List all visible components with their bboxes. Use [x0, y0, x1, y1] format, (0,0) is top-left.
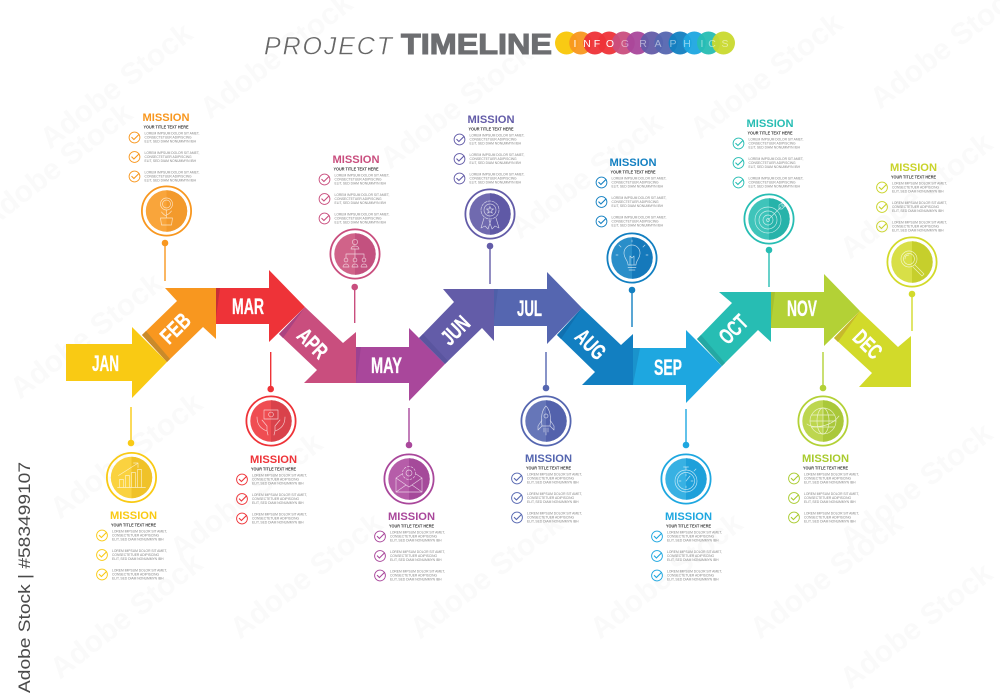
arrow: jan	[66, 327, 167, 398]
checklist	[789, 473, 859, 524]
checklist: LOREM IMPSUM DOLOR SIT AMET,	[112, 569, 167, 573]
checklist: CONSECTETUER ADIPISCING	[804, 477, 852, 481]
pin: apr	[351, 284, 358, 323]
checklist: LOREM IMPSUM DOLOR SIT AMET,	[334, 193, 389, 197]
checklist: LOREM IMPSUM DOLOR SIT AMET,	[334, 174, 389, 178]
checklist	[733, 138, 803, 189]
checklist: CONSECTETUER ADIPISCING	[390, 554, 438, 558]
checklist: LOREM IMPSUM DOLOR SIT AMET,	[390, 550, 445, 554]
checklist: ELIT, SED DIAM NONUMMYN IBH	[334, 182, 387, 186]
checklist: CONSECTETUER ADIPISCING	[252, 478, 300, 482]
title badge: infographics circles: S	[721, 38, 729, 50]
watermark pattern: Adobe Stock	[504, 106, 669, 246]
title badge: infographics circles: H	[683, 38, 691, 50]
heading: MISSION	[142, 112, 190, 124]
title badge: infographics circles: P	[669, 38, 677, 50]
checklist: LOREM IMPSUM DOLOR SIT AMET,	[804, 512, 859, 516]
heading: MISSION	[332, 154, 380, 166]
checklist: LOREM IMPSUM DOLOR SIT AMET,	[804, 492, 859, 496]
checklist: LOREM IMPSUM DOLOR SIT AMET,	[112, 530, 167, 534]
arrow: oct: OCT	[714, 309, 753, 349]
watermark pattern: Adobe Stock	[164, 426, 329, 566]
timeline arrows	[66, 270, 911, 403]
checklist: ELIT, SED DIAM NONUMMYN IBH	[892, 209, 944, 213]
checklist: LOREM IMPSUM DOLOR SIT AMET,	[112, 549, 167, 553]
checklist: CONSECTETUER ADIPISCING	[748, 142, 796, 146]
heading: MISSION	[610, 157, 656, 169]
checklist: ELIT, SED DIAM NONUMMYN IBH	[748, 165, 801, 169]
icon: globe	[798, 396, 848, 446]
checklist: LOREM IMPSUM DOLOR SIT AMET,	[252, 493, 307, 497]
arrow: dec: DEC	[848, 325, 887, 364]
title word: timeline: TIMELINE	[401, 29, 552, 61]
watermark pattern: Adobe Stock	[44, 386, 209, 526]
checklist: CONSECTETUER ADIPISCING	[144, 155, 192, 159]
checklist: ELIT, SED DIAM NONUMMYN IBH	[612, 204, 664, 208]
checklist: LOREM IMPSUM DOLOR SIT AMET,	[470, 153, 524, 157]
stock id caption: Adobe Stock | #583499107	[15, 462, 34, 693]
icon: target with arrow	[744, 194, 794, 244]
arrow: jan: JAN	[92, 351, 119, 376]
watermark pattern: Adobe Stock	[404, 506, 569, 646]
panel: oct mission	[733, 118, 803, 189]
arrow: jul: JUL	[517, 296, 542, 321]
checklist: CONSECTETUER ADIPISCING	[804, 516, 852, 520]
icon: team hierarchy	[330, 229, 380, 279]
checklist: CONSECTETUER ADIPISCING	[470, 138, 517, 142]
checklist: LOREM IMPSUM DOLOR SIT AMET,	[612, 177, 666, 181]
checklist: CONSECTETUER ADIPISCING	[527, 477, 575, 481]
heading: MISSION	[890, 162, 937, 174]
checklist: LOREM IMPSUM DOLOR SIT AMET,	[527, 473, 582, 477]
checklist: ELIT, SED DIAM NONUMMYN IBH	[804, 500, 856, 504]
icon: stopwatch	[661, 454, 711, 504]
checklist	[129, 132, 199, 183]
checklist: CONSECTETUER ADIPISCING	[390, 574, 438, 578]
arrow: aug: AUG	[570, 324, 611, 365]
panel: aug mission	[596, 157, 666, 228]
pin: oct	[766, 247, 772, 287]
arrow: sep: SEP	[654, 355, 682, 380]
subtitle: YOUR TITLE TEXT HERE	[891, 174, 936, 180]
checklist: LOREM IMPSUM DOLOR SIT AMET,	[144, 132, 199, 136]
icon: award rosette	[465, 189, 515, 239]
checklist: CONSECTETUER ADIPISCING	[527, 496, 575, 500]
title word: project: PROJECT	[264, 32, 394, 60]
checklist	[596, 177, 666, 228]
checklist: LOREM IMPSUM DOLOR SIT AMET,	[144, 171, 199, 175]
watermark pattern: Adobe Stock	[374, 36, 539, 176]
checklist: CONSECTETUER ADIPISCING	[748, 161, 796, 165]
title badge: infographics circles: O	[606, 38, 614, 50]
checklist: LOREM IMPSUM DOLOR SIT AMET,	[390, 531, 445, 535]
title badge: infographics circles: N	[583, 38, 591, 50]
checklist: CONSECTETUER ADIPISCING	[144, 175, 192, 179]
watermark pattern: Adobe Stock	[44, 546, 209, 686]
arrow: nov: NOV	[787, 296, 817, 321]
checklist: LOREM IMPSUM DOLOR SIT AMET,	[892, 221, 947, 225]
pin: aug	[629, 287, 635, 327]
panel: jul mission	[512, 453, 582, 524]
heading: MISSION	[110, 510, 157, 522]
heading: MISSION	[468, 114, 514, 126]
arrow: jul	[494, 272, 582, 344]
title badge: infographics circles: I	[701, 38, 703, 50]
checklist: LOREM IMPSUM DOLOR SIT AMET,	[527, 492, 582, 496]
checklist: CONSECTETUER ADIPISCING	[470, 177, 517, 181]
panel: jan mission	[97, 510, 167, 581]
pin: sep	[683, 409, 689, 448]
checklist: LOREM IMPSUM DOLOR SIT AMET,	[144, 151, 199, 155]
title	[264, 29, 735, 61]
checklist: ELIT, SED DIAM NONUMMYN IBH	[527, 500, 579, 504]
title badge: infographics circles: C	[708, 38, 716, 50]
checklist: CONSECTETUER ADIPISCING	[334, 197, 382, 201]
pin: may	[406, 408, 412, 448]
checklist: CONSECTETUER ADIPISCING	[112, 534, 160, 538]
checklist: LOREM IMPSUM DOLOR SIT AMET,	[390, 570, 445, 574]
arrow: aug	[557, 308, 633, 385]
heading: MISSION	[665, 511, 712, 523]
checklist	[97, 530, 167, 581]
checklist: CONSECTETUER ADIPISCING	[667, 554, 715, 558]
checklist: LOREM IMPSUM DOLOR SIT AMET,	[892, 201, 947, 205]
icon: magnifier	[887, 237, 937, 287]
arrow: mar	[216, 270, 305, 342]
icon: hands with banknote	[246, 396, 296, 446]
checklist: LOREM IMPSUM DOLOR SIT AMET,	[612, 196, 666, 200]
checklist: CONSECTETUER ADIPISCING	[804, 496, 852, 500]
checklist: LOREM IMPSUM DOLOR SIT AMET,	[748, 177, 803, 181]
subtitle: YOUR TITLE TEXT HERE	[610, 170, 656, 174]
checklist: ELIT, SED DIAM NONUMMYN IBH	[334, 201, 387, 205]
checklist: CONSECTETUER ADIPISCING	[667, 574, 715, 578]
subtitle: YOUR TITLE TEXT HERE	[803, 466, 848, 470]
panel: mar mission	[237, 454, 307, 525]
icon badges	[107, 186, 937, 504]
checklist: ELIT, SED DIAM NONUMMYN IBH	[804, 481, 856, 485]
arrow: jun: JUN	[436, 311, 475, 350]
checklist: ELIT, SED DIAM NONUMMYN IBH	[612, 224, 664, 228]
icon: light bulb	[607, 233, 657, 283]
watermark pattern: Adobe Stock	[834, 126, 999, 266]
checklist	[454, 134, 524, 185]
arrow: may: MAY	[371, 353, 402, 378]
watermark pattern: Adobe Stock	[34, 16, 199, 156]
arrow: nov	[771, 274, 860, 346]
checklist	[652, 531, 722, 582]
checklist	[319, 174, 389, 225]
checklist: ELIT, SED DIAM NONUMMYN IBH	[527, 481, 579, 485]
subtitle: YOUR TITLE TEXT HERE	[389, 524, 434, 528]
checklist: ELIT, SED DIAM NONUMMYN IBH	[144, 140, 197, 144]
checklist: LOREM IMPSUM DOLOR SIT AMET,	[667, 570, 722, 574]
checklist: ELIT, SED DIAM NONUMMYN IBH	[112, 538, 164, 542]
checklist: ELIT, SED DIAM NONUMMYN IBH	[144, 159, 197, 163]
checklist: LOREM IMPSUM DOLOR SIT AMET,	[804, 473, 859, 477]
subtitle: YOUR TITLE TEXT HERE	[526, 466, 571, 470]
checklist: CONSECTETUER ADIPISCING	[748, 181, 796, 185]
watermark pattern: Adobe Stock	[684, 6, 849, 146]
checklist: ELIT, SED DIAM NONUMMYN IBH	[892, 190, 944, 194]
watermark pattern: Adobe Stock	[834, 416, 999, 556]
arrow: jun	[419, 289, 494, 364]
checklist: ELIT, SED DIAM NONUMMYN IBH	[252, 482, 304, 486]
heading: MISSION	[250, 454, 297, 466]
checklist: ELIT, SED DIAM NONUMMYN IBH	[527, 520, 579, 524]
subtitle: YOUR TITLE TEXT HERE	[666, 524, 711, 528]
checklist: CONSECTETUER ADIPISCING	[612, 200, 659, 204]
checklist: CONSECTETUER ADIPISCING	[892, 205, 940, 209]
checklist: ELIT, SED DIAM NONUMMYN IBH	[667, 558, 719, 562]
checklist: LOREM IMPSUM DOLOR SIT AMET,	[748, 157, 803, 161]
checklist: LOREM IMPSUM DOLOR SIT AMET,	[667, 550, 722, 554]
title badge: infographics circles: A	[654, 38, 662, 50]
checklist: ELIT, SED DIAM NONUMMYN IBH	[334, 221, 387, 225]
checklist: ELIT, SED DIAM NONUMMYN IBH	[390, 558, 442, 562]
checklist: LOREM IMPSUM DOLOR SIT AMET,	[892, 182, 947, 186]
arrow: feb: FEB	[155, 308, 196, 349]
icon: envelope with gear	[384, 454, 434, 504]
arrow: may	[356, 328, 445, 401]
panel: sep mission	[652, 511, 722, 582]
title badge: infographics circles: R	[639, 38, 647, 50]
checklist: ELIT, SED DIAM NONUMMYN IBH	[252, 501, 304, 505]
panel: feb mission	[129, 112, 199, 183]
checklist: ELIT, SED DIAM NONUMMYN IBH	[470, 142, 522, 146]
checklist: LOREM IMPSUM DOLOR SIT AMET,	[252, 474, 307, 478]
title badge: infographics circles: G	[621, 38, 629, 50]
checklist: ELIT, SED DIAM NONUMMYN IBH	[748, 185, 801, 189]
watermark pattern: Adobe Stock	[584, 506, 749, 646]
connector pins	[128, 240, 915, 448]
checklist: CONSECTETUER ADIPISCING	[112, 553, 160, 557]
checklist: LOREM IMPSUM DOLOR SIT AMET,	[470, 173, 524, 177]
subtitle: YOUR TITLE TEXT HERE	[334, 166, 379, 172]
checklist: CONSECTETUER ADIPISCING	[612, 220, 659, 224]
title badge: infographics circles: F	[594, 38, 600, 50]
checklist: ELIT, SED DIAM NONUMMYN IBH	[112, 557, 164, 561]
icon: bar chart	[107, 453, 156, 502]
checklist: ELIT, SED DIAM NONUMMYN IBH	[470, 161, 522, 165]
watermark pattern: Adobe Stock	[4, 266, 169, 406]
heading: MISSION	[388, 511, 435, 523]
panel: may mission	[375, 511, 445, 582]
pin: feb	[162, 240, 168, 281]
arrow: apr	[279, 307, 356, 383]
title badge: infographics circles	[555, 32, 735, 54]
checklist: LOREM IMPSUM DOLOR SIT AMET,	[667, 531, 722, 535]
checklist: CONSECTETUER ADIPISCING	[144, 136, 192, 140]
subtitle: YOUR TITLE TEXT HERE	[251, 466, 296, 472]
checklist: LOREM IMPSUM DOLOR SIT AMET,	[470, 134, 524, 138]
checklist: ELIT, SED DIAM NONUMMYN IBH	[390, 539, 442, 543]
arrow: mar: MAR	[232, 294, 264, 319]
checklist	[877, 182, 947, 233]
pin: jul	[543, 352, 549, 391]
title badge: infographics circles: I	[574, 38, 576, 50]
panel: nov mission	[789, 453, 859, 524]
arrow: apr: APR	[292, 323, 333, 364]
heading: MISSION	[746, 118, 794, 130]
checklist: ELIT, SED DIAM NONUMMYN IBH	[390, 578, 442, 582]
subtitle: YOUR TITLE TEXT HERE	[748, 130, 793, 136]
subtitle: YOUR TITLE TEXT HERE	[111, 522, 156, 528]
checklist: CONSECTETUER ADIPISCING	[892, 225, 940, 229]
checklist: ELIT, SED DIAM NONUMMYN IBH	[748, 146, 801, 150]
pin: mar	[267, 352, 274, 392]
checklist: LOREM IMPSUM DOLOR SIT AMET,	[612, 216, 666, 220]
panel: apr mission	[319, 154, 389, 225]
heading: MISSION	[802, 453, 849, 465]
checklist: LOREM IMPSUM DOLOR SIT AMET,	[252, 513, 307, 517]
panel: dec mission	[877, 162, 947, 233]
checklist: ELIT, SED DIAM NONUMMYN IBH	[612, 185, 664, 189]
subtitle: YOUR TITLE TEXT HERE	[144, 124, 189, 130]
subtitle: YOUR TITLE TEXT HERE	[468, 126, 514, 132]
watermark pattern: Adobe Stock	[744, 506, 909, 646]
checklist: CONSECTETUER ADIPISCING	[612, 181, 659, 185]
checklist: CONSECTETUER ADIPISCING	[667, 535, 715, 539]
checklist: CONSECTETUER ADIPISCING	[334, 178, 382, 182]
checklist	[512, 473, 582, 524]
checklist: CONSECTETUER ADIPISCING	[470, 157, 517, 161]
checklist: CONSECTETUER ADIPISCING	[527, 516, 575, 520]
checklist: ELIT, SED DIAM NONUMMYN IBH	[667, 539, 719, 543]
checklist	[375, 531, 445, 582]
pin: jun	[487, 243, 493, 284]
checklist: ELIT, SED DIAM NONUMMYN IBH	[112, 577, 164, 581]
arrow: sep	[633, 330, 722, 403]
arrow: oct	[697, 292, 771, 366]
checklist: LOREM IMPSUM DOLOR SIT AMET,	[527, 512, 582, 516]
checklist: CONSECTETUER ADIPISCING	[252, 517, 300, 521]
checklist: CONSECTETUER ADIPISCING	[390, 535, 438, 539]
checklist: CONSECTETUER ADIPISCING	[334, 217, 382, 221]
arrow: feb	[142, 288, 216, 362]
panel: jun mission	[454, 114, 524, 185]
checklist: ELIT, SED DIAM NONUMMYN IBH	[470, 181, 522, 185]
checklist: LOREM IMPSUM DOLOR SIT AMET,	[748, 138, 803, 142]
icon: rocket	[521, 396, 571, 446]
pin: dec	[909, 291, 915, 331]
checklist: ELIT, SED DIAM NONUMMYN IBH	[252, 521, 304, 525]
watermark pattern: Adobe Stock	[224, 506, 389, 646]
pin: jan	[128, 407, 134, 446]
checklist	[237, 474, 307, 525]
checklist: LOREM IMPSUM DOLOR SIT AMET,	[334, 213, 389, 217]
checklist: CONSECTETUER ADIPISCING	[112, 573, 160, 577]
pin: nov	[820, 352, 826, 391]
checklist: ELIT, SED DIAM NONUMMYN IBH	[144, 179, 197, 183]
heading: MISSION	[525, 453, 572, 465]
arrow: dec	[834, 311, 911, 387]
checklist: CONSECTETUER ADIPISCING	[252, 497, 300, 501]
checklist: CONSECTETUER ADIPISCING	[892, 186, 940, 190]
watermark pattern: Adobe Stock	[834, 556, 999, 696]
checklist: ELIT, SED DIAM NONUMMYN IBH	[892, 229, 944, 233]
checklist: ELIT, SED DIAM NONUMMYN IBH	[804, 520, 856, 524]
icon: coin plant	[142, 186, 191, 236]
checklist: ELIT, SED DIAM NONUMMYN IBH	[667, 578, 719, 582]
